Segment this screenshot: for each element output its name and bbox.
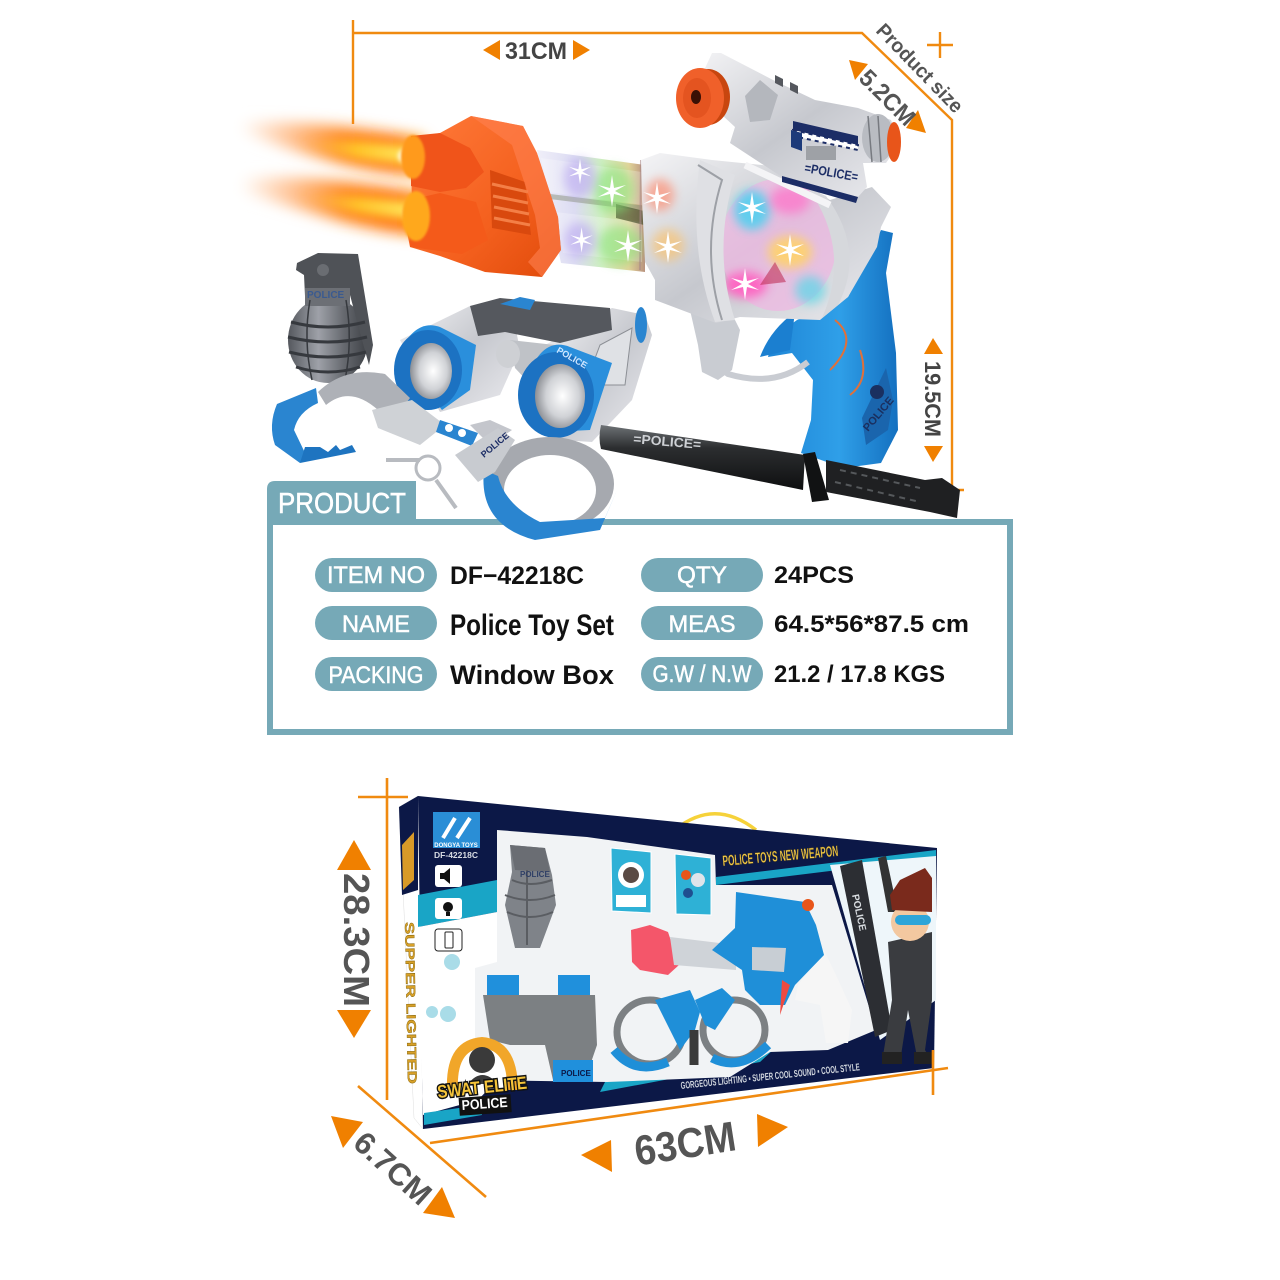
cartoon police boy bbox=[878, 856, 932, 1064]
box side panel bbox=[399, 796, 423, 1129]
closed cuff bbox=[455, 428, 617, 540]
table frame bbox=[270, 522, 1010, 732]
icon: sound bbox=[435, 865, 462, 887]
binoculars toy: POLICE bbox=[555, 345, 589, 370]
white plastic tray bbox=[475, 830, 876, 1082]
dimension: 31CM width bbox=[483, 38, 590, 65]
value: name: Police Toy Set bbox=[450, 609, 614, 642]
box side panel: SUPPER LIGHTED bbox=[402, 922, 420, 1084]
box dimension lines bbox=[358, 778, 948, 1197]
silver gun frame bbox=[641, 153, 891, 323]
icon: battery bbox=[435, 929, 462, 951]
pill: name bbox=[315, 606, 437, 640]
centre hinge links bbox=[372, 400, 512, 446]
pill: packing bbox=[315, 657, 437, 691]
dimension: 6.7CM depth bbox=[331, 1116, 455, 1218]
pill: meas bbox=[641, 606, 763, 640]
feature captions: GORGEOUS LIGHTING ▪ SUPER COOL SOUND ▪ COOL STYLE bbox=[680, 1062, 861, 1092]
instruction card: character bbox=[611, 848, 651, 913]
pill: qty bbox=[641, 558, 763, 592]
blue pistol grip bbox=[768, 230, 898, 468]
value: meas: 64.5*56*87.5 cm bbox=[774, 611, 969, 638]
gun in tray bbox=[631, 892, 852, 1043]
handcuffs in tray bbox=[614, 988, 768, 1067]
brand logo: DONGYA TOYS bbox=[434, 843, 478, 849]
panel: product specification table bbox=[267, 481, 1010, 732]
pill: packing: PACKING bbox=[328, 662, 424, 689]
pill: name: NAME bbox=[342, 611, 410, 638]
value: qty: 24PCS bbox=[774, 562, 854, 589]
dimension: 6.7CM depth: 6.7CM bbox=[347, 1125, 439, 1212]
open cuff bbox=[272, 372, 410, 463]
dimension: 19.5CM height: 19.5CM bbox=[920, 361, 945, 437]
binoculars in tray bbox=[483, 975, 597, 1082]
dimension: 19.5CM height bbox=[920, 338, 945, 462]
instruction card: contents bbox=[675, 854, 711, 915]
police baton toy: =POLICE= bbox=[633, 431, 702, 452]
main toy gun bbox=[401, 53, 901, 468]
label: product size: Product size bbox=[871, 20, 967, 118]
model number: DF-42218C bbox=[434, 850, 478, 860]
transparent light-up barrels bbox=[537, 150, 648, 272]
gun hammer and trigger guard bbox=[690, 300, 808, 380]
closed cuff: POLICE bbox=[479, 430, 511, 460]
keys bbox=[386, 456, 456, 508]
flames from the gun barrels bbox=[240, 122, 432, 236]
product size dimension lines bbox=[353, 20, 964, 490]
dimension: 28.3CM height bbox=[336, 840, 377, 1038]
swat elite badge: POLICE bbox=[461, 1094, 508, 1113]
pill: qty: QTY bbox=[677, 562, 727, 589]
value: packing: Window Box bbox=[450, 660, 614, 690]
retail box with toys bbox=[399, 796, 937, 1129]
pill: item no bbox=[315, 558, 437, 592]
baton in tray bbox=[840, 860, 892, 1037]
product tab heading: PRODUCT bbox=[278, 488, 406, 520]
police baton toy bbox=[600, 425, 960, 518]
pill: item no: ITEM NO bbox=[327, 562, 425, 589]
dimension: 31CM width: 31CM bbox=[505, 38, 567, 65]
grenade toy bbox=[288, 253, 373, 383]
grenade in tray bbox=[505, 845, 556, 948]
dimension: 28.3CM height: 28.3CM bbox=[336, 873, 377, 1007]
yellow handle bbox=[676, 814, 756, 830]
rainbow lights cylinder bbox=[643, 160, 850, 322]
dimension: 63CM width bbox=[581, 1112, 788, 1175]
top scope with orange lens: =POLICE= bbox=[803, 160, 860, 184]
value: weight: 21.2 / 17.8 KGS bbox=[774, 661, 945, 688]
grenade in tray: POLICE bbox=[520, 870, 550, 879]
binoculars in tray: POLICE bbox=[561, 1069, 591, 1078]
product tab heading bbox=[267, 481, 416, 525]
baton in tray: POLICE bbox=[849, 893, 868, 932]
value: item no: DF−42218C bbox=[450, 562, 584, 590]
binoculars toy bbox=[394, 297, 652, 442]
box front panel bbox=[418, 796, 937, 1129]
brand logo bbox=[433, 812, 480, 849]
icon: light bbox=[435, 898, 462, 919]
swat elite badge bbox=[436, 1037, 528, 1116]
blue pistol grip: POLICE bbox=[861, 395, 897, 434]
top scope with orange lens bbox=[676, 53, 901, 203]
dimension: 63CM width: 63CM bbox=[631, 1112, 739, 1175]
handcuffs toy bbox=[272, 372, 617, 540]
grenade toy: POLICE bbox=[307, 290, 345, 301]
orange muzzle block bbox=[401, 116, 561, 277]
pill: meas: MEAS bbox=[668, 611, 736, 638]
heading: police toys new weapon: POLICE TOYS NEW WEAPON bbox=[722, 843, 839, 870]
dimension: 5.2CM depth: 5.2CM bbox=[853, 64, 921, 132]
swat elite badge: SWAT ELITE bbox=[436, 1073, 528, 1102]
pill: gross and net weight: G.W / N.W bbox=[652, 661, 752, 688]
